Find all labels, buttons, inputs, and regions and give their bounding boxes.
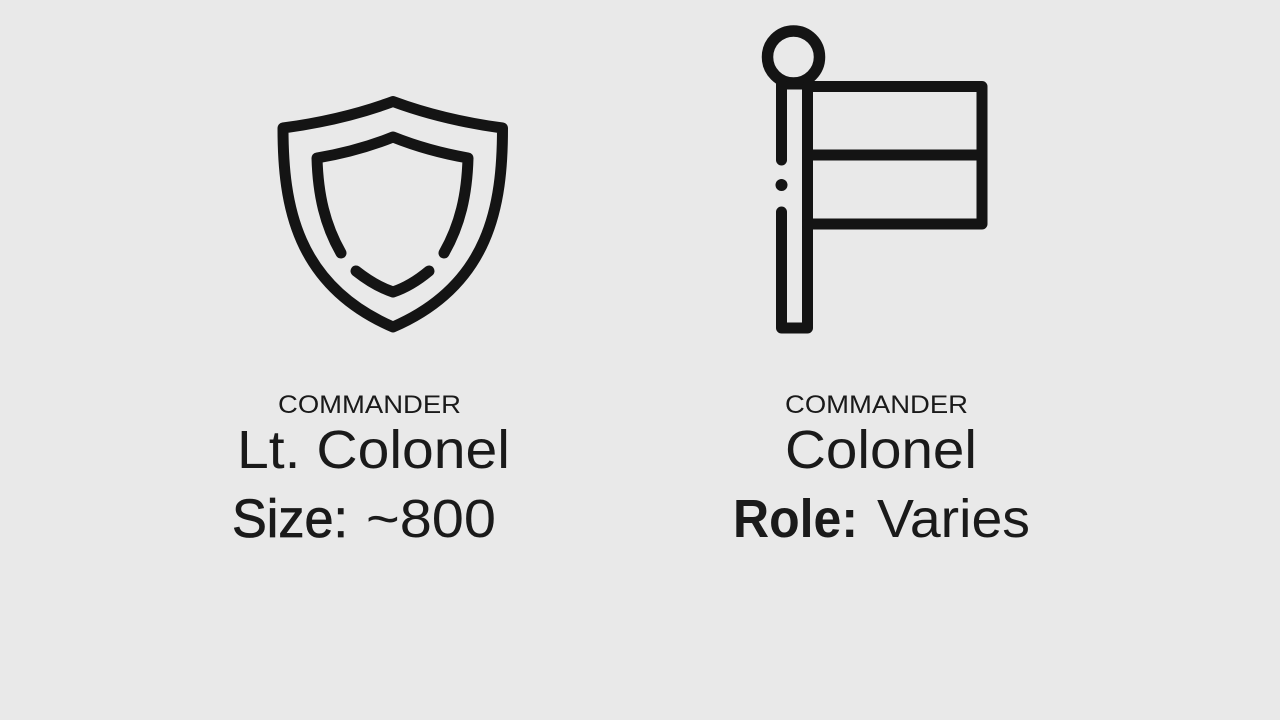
label: commander: COMMANDER — [785, 391, 968, 419]
size: about 800: Size: — [232, 489, 348, 549]
icon: flag — [768, 31, 982, 328]
role: varies: Role: — [733, 489, 858, 549]
panel: colonel — [733, 31, 1030, 549]
size: about 800 — [232, 489, 496, 549]
rank: Colonel: Colonel — [785, 420, 977, 480]
panel: lieutenant colonel — [232, 102, 510, 549]
icon: shield — [283, 102, 502, 327]
role: varies: Varies — [877, 489, 1030, 549]
size: about 800: ~800 — [366, 489, 496, 549]
label: commander: COMMANDER — [278, 391, 461, 419]
role: varies — [733, 489, 1030, 549]
rank: Lt. Colonel: Lt. Colonel — [237, 420, 510, 480]
